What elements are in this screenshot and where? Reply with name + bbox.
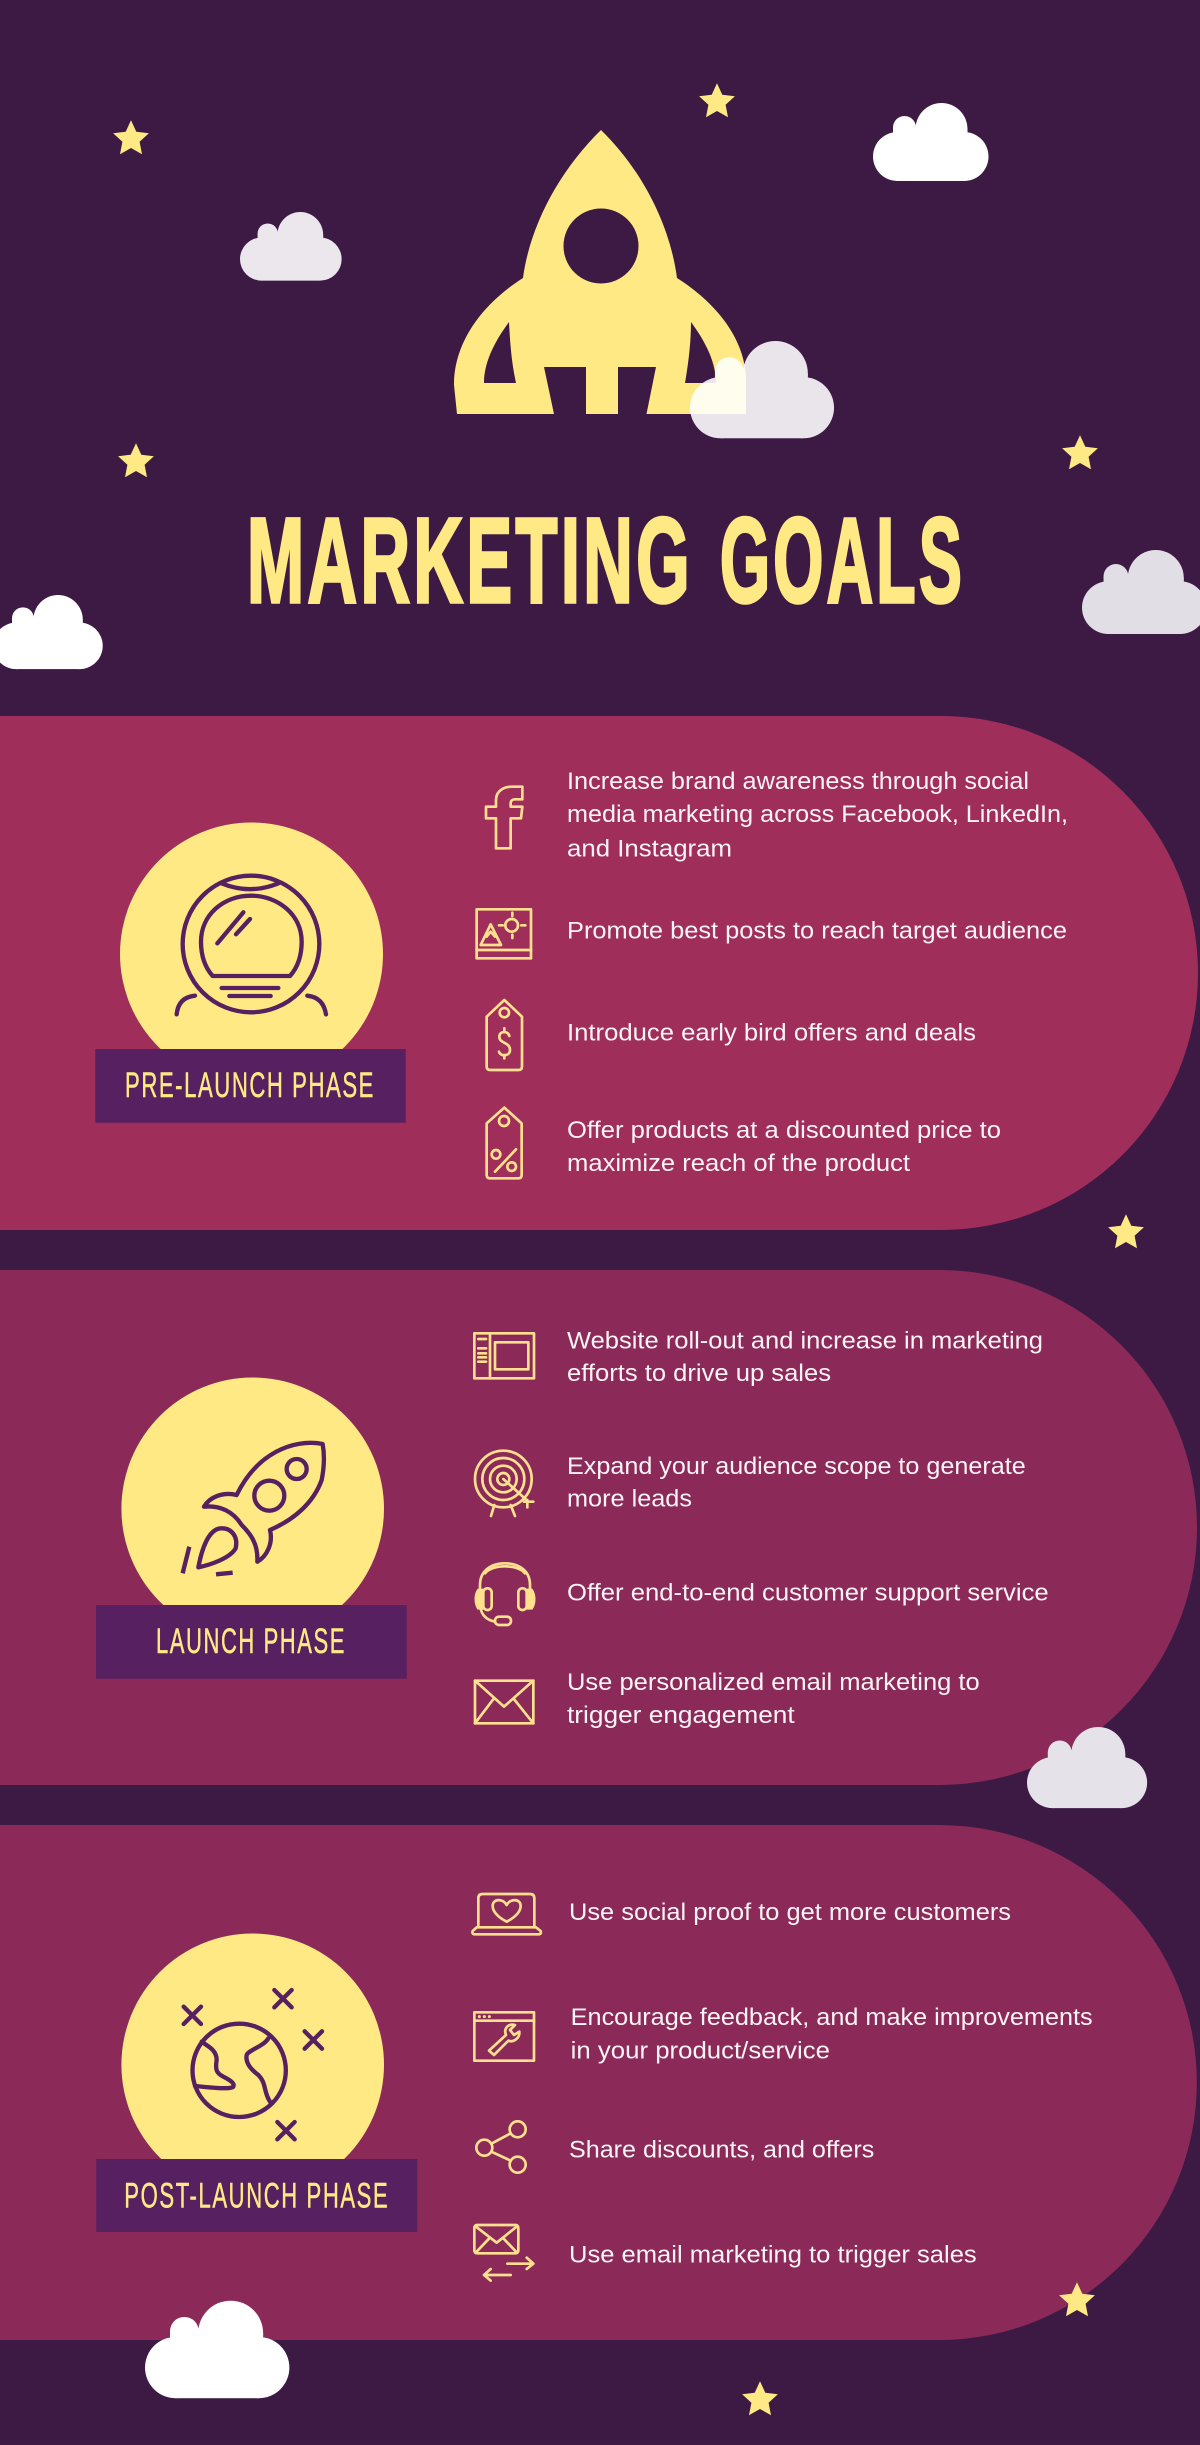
goal text: Share discounts, and offers <box>569 2136 874 2163</box>
goal text: Offer end-to-end customer support service <box>567 1580 1049 1607</box>
phase label <box>95 1049 406 1123</box>
panel background <box>0 1270 1197 1785</box>
goal text: Use email marketing to trigger sales <box>569 2241 977 2268</box>
panel: post-launch phase <box>0 1825 1197 2340</box>
cloud: left of rocket <box>240 212 342 281</box>
hero rocket <box>454 130 746 414</box>
panel background <box>0 716 1198 1230</box>
goal text: media marketing across Facebook, LinkedIn, <box>567 801 1068 828</box>
goal text: Expand your audience scope to generate <box>567 1453 1026 1480</box>
cloud: left of title <box>0 595 103 669</box>
phase circle <box>121 1378 384 1640</box>
icon: web page <box>474 1333 534 1378</box>
goal text: Use personalized email marketing to <box>567 1669 980 1696</box>
icon: globe <box>184 1990 322 2139</box>
phase circle <box>120 822 383 1086</box>
icon: window wrench <box>474 2012 534 2061</box>
cloud: right of title <box>1082 550 1200 634</box>
cloud overlapping rocket <box>690 341 834 438</box>
star 4 <box>1062 435 1098 469</box>
star 7 <box>742 2381 778 2415</box>
star 5 <box>1108 1214 1144 1248</box>
goal text: Encourage feedback, and make improvements <box>571 2004 1093 2031</box>
icon: rocket <box>183 1443 324 1574</box>
cloud: lower right of launch panel <box>1027 1727 1147 1808</box>
icon: facebook <box>486 787 522 848</box>
title: GOALS <box>720 492 965 628</box>
goal text: Use social proof to get more customers <box>569 1899 1011 1926</box>
icon: envelope <box>475 1681 533 1723</box>
phase label <box>96 2159 417 2232</box>
panel background <box>0 1825 1197 2340</box>
goal text: efforts to drive up sales <box>567 1360 831 1387</box>
goal text: maximize reach of the product <box>567 1150 910 1177</box>
panel: launch phase <box>0 1270 1197 1785</box>
star 6 <box>1059 2282 1095 2316</box>
cloud: top right <box>873 103 988 181</box>
cloud: bottom <box>145 2301 289 2398</box>
title: MARKETING <box>247 492 693 628</box>
icon: target <box>475 1451 533 1516</box>
goal text: Offer products at a discounted price to <box>567 1117 1001 1144</box>
phase label: PRE-LAUNCH PHASE <box>125 1066 375 1105</box>
icon: headset <box>476 1563 534 1625</box>
goal text: and Instagram <box>567 836 732 862</box>
star 3 <box>118 443 154 477</box>
star 1 <box>113 120 149 154</box>
icon: astronaut helmet <box>177 876 326 1014</box>
icon: picture <box>477 909 531 958</box>
star 2 <box>699 83 735 117</box>
icon: laptop heart <box>472 1894 541 1934</box>
icon: dollar tag <box>487 1000 522 1070</box>
phase label <box>96 1605 407 1679</box>
panel: pre-launch phase <box>0 716 1198 1230</box>
phase label: LAUNCH PHASE <box>156 1622 346 1661</box>
goal text: Promote best posts to reach target audience <box>567 918 1067 945</box>
icon: share <box>476 2121 526 2173</box>
phase circle <box>121 1934 384 2196</box>
icon: percent tag <box>487 1108 522 1178</box>
goal text: Introduce early bird offers and deals <box>567 1020 976 1047</box>
phase label: POST-LAUNCH PHASE <box>124 2176 389 2215</box>
goal text: Website roll-out and increase in marketing <box>567 1327 1043 1354</box>
goal text: Increase brand awareness through social <box>567 768 1029 795</box>
goal text: in your product/service <box>571 2037 830 2064</box>
icon: email arrows <box>474 2225 533 2281</box>
goal text: more leads <box>567 1486 692 1513</box>
goal text: trigger engagement <box>567 1702 795 1729</box>
